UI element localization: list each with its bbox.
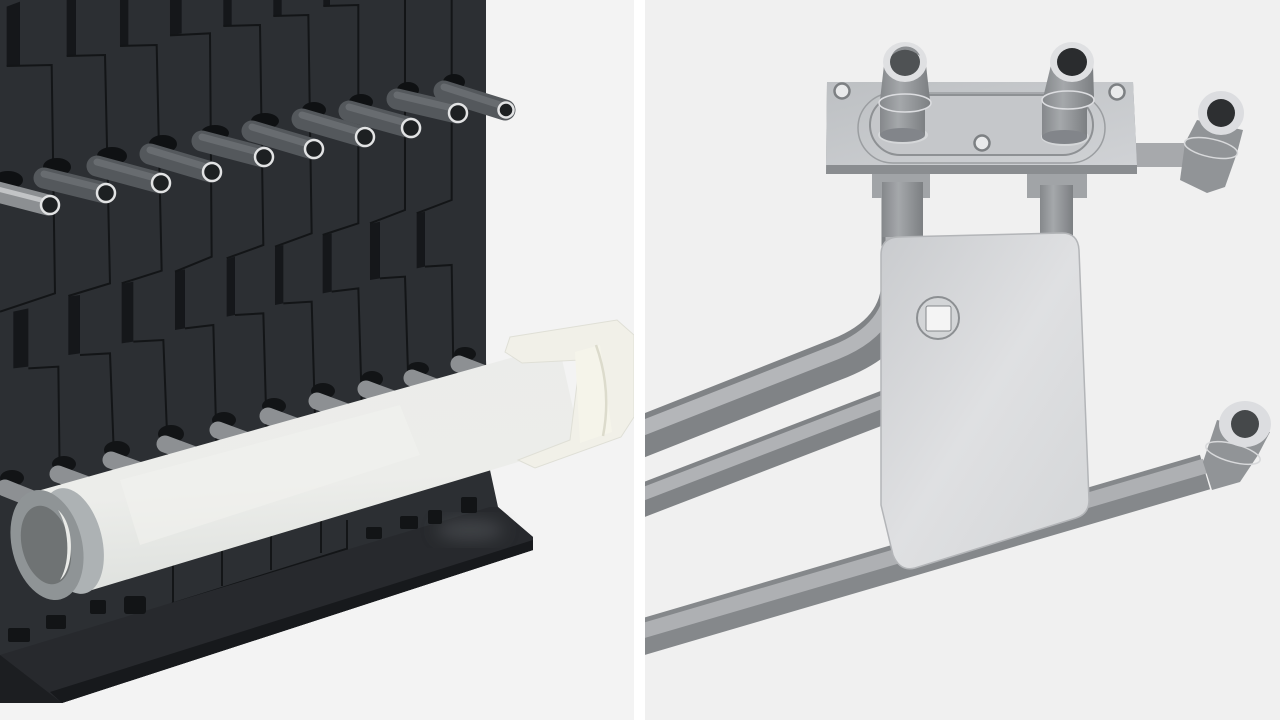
- filter end collar: [505, 320, 634, 468]
- base ledge: [62, 507, 533, 703]
- tube socket holes: [0, 74, 465, 189]
- base slots: [8, 497, 477, 642]
- tube bodies: [0, 87, 505, 205]
- panel: right photo: [635, 0, 1280, 720]
- lower row of tube stubs: [0, 347, 485, 498]
- middle tube: [635, 399, 890, 503]
- side outlet elbow: [1180, 91, 1244, 193]
- seams below the white tube: [171, 520, 348, 603]
- lower outlet elbow: [1203, 401, 1271, 490]
- lower long tube: [635, 466, 1205, 639]
- left pipe connector: [878, 42, 931, 144]
- under-flange mounting blocks: [872, 173, 1087, 240]
- upper row of tubes: [0, 74, 514, 214]
- notches and seams: [0, 0, 453, 500]
- gray ring and tube mouth: [10, 488, 104, 600]
- upper bent tube: [635, 190, 902, 439]
- mounting plate with square hole: [881, 233, 1089, 569]
- top flange: [826, 82, 1137, 174]
- panel: left photo: [0, 0, 634, 720]
- side outlet pipe: [1136, 143, 1185, 167]
- right pipe connector: [1041, 42, 1094, 146]
- white filter tube: [0, 320, 634, 608]
- tube rims: [41, 102, 514, 214]
- dark slatted block: [0, 0, 533, 703]
